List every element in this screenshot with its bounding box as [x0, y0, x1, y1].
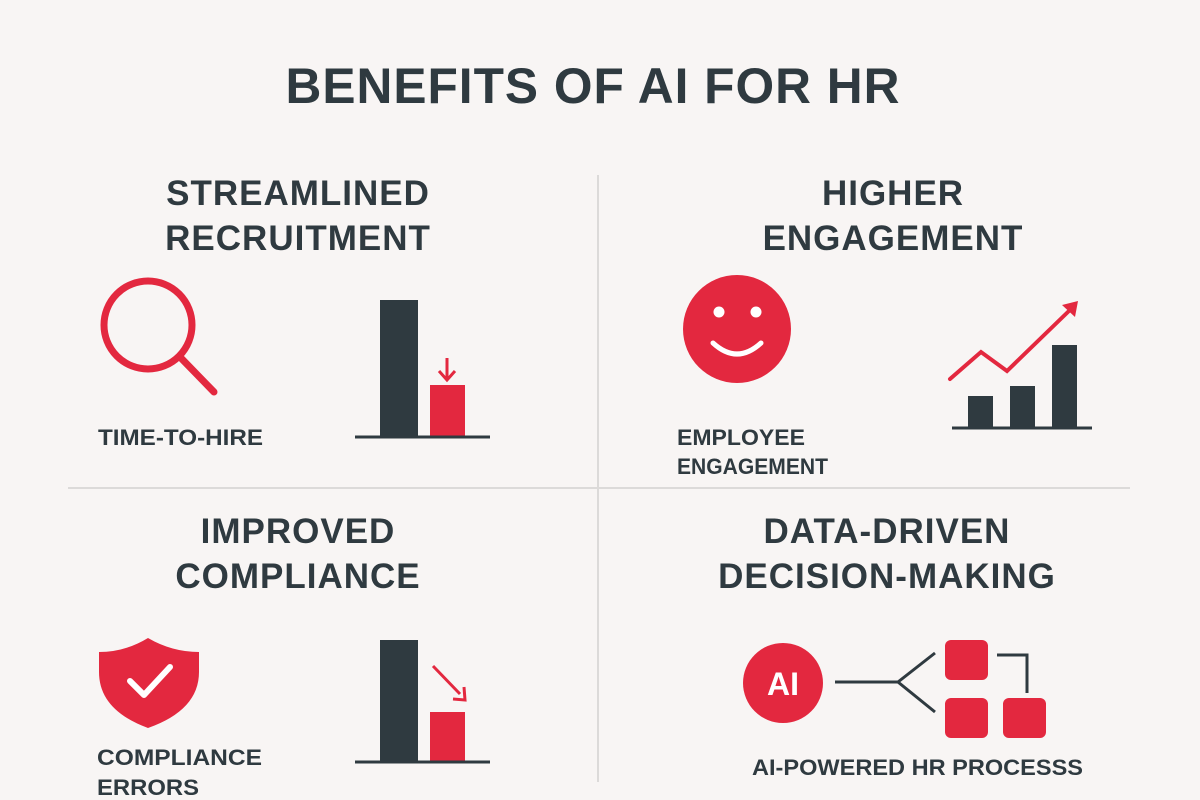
icon: AI circle	[743, 643, 823, 723]
heading: streamlined recruitment	[165, 174, 431, 258]
label: compliance errors	[97, 745, 262, 800]
icon: AI circle: AI	[767, 666, 799, 702]
label: employee engagement: ENGAGEMENT	[677, 454, 829, 479]
chart: time-to-hire bars	[355, 300, 490, 437]
chart: rising bars	[950, 301, 1092, 428]
chart: compliance bars	[355, 640, 490, 762]
heading: data-driven decision-making: DECISION-MAKING	[718, 557, 1056, 596]
icon: shield	[99, 638, 199, 728]
heading: streamlined recruitment: RECRUITMENT	[165, 219, 431, 258]
heading: data-driven decision-making	[718, 512, 1056, 596]
icon: smiley	[683, 275, 791, 383]
heading: higher engagement: HIGHER	[822, 174, 964, 213]
panel: higher engagement	[677, 174, 1092, 479]
label: employee engagement	[677, 425, 829, 479]
heading: improved compliance: COMPLIANCE	[175, 557, 421, 596]
label: ai-powered hr process: AI-POWERED HR PROCESSS	[752, 755, 1083, 780]
heading: data-driven decision-making: DATA-DRIVEN	[764, 512, 1010, 551]
heading: improved compliance: IMPROVED	[201, 512, 395, 551]
heading: higher engagement: ENGAGEMENT	[763, 219, 1023, 258]
heading: improved compliance	[175, 512, 421, 596]
label: compliance errors: ERRORS	[97, 775, 199, 800]
icon: magnifier	[104, 281, 214, 392]
label: compliance errors: COMPLIANCE	[97, 745, 262, 770]
panel: data-driven decision-making	[718, 512, 1083, 780]
heading: higher engagement	[763, 174, 1023, 258]
diagram: process flow	[835, 640, 1046, 738]
panel: streamlined recruitment	[98, 174, 490, 450]
panel: improved compliance	[97, 512, 490, 800]
label: time-to-hire: TIME-TO-HIRE	[98, 425, 263, 450]
label: employee engagement: EMPLOYEE	[677, 425, 805, 450]
heading: streamlined recruitment: STREAMLINED	[166, 174, 430, 213]
title: BENEFITS OF AI FOR HR	[286, 58, 900, 114]
